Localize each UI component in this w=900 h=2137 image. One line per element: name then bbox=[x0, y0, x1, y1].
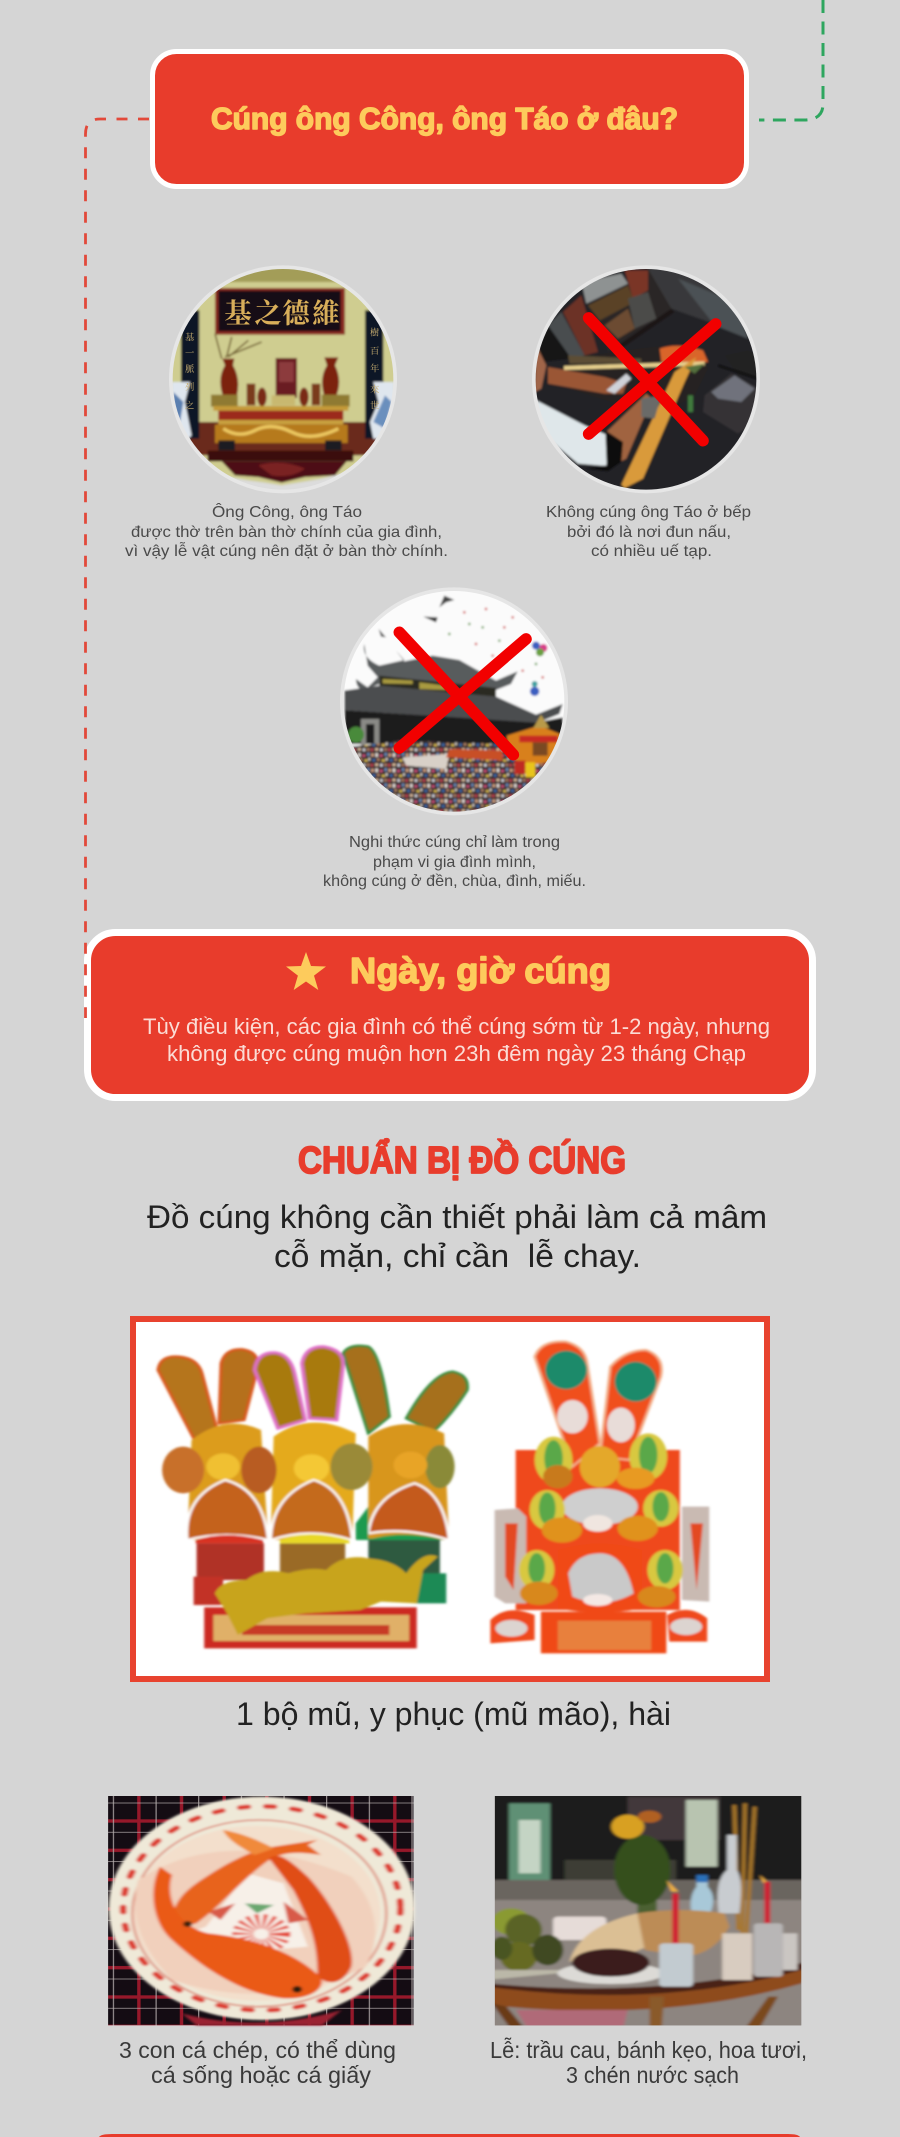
icon: red cross bbox=[589, 318, 716, 441]
red paper hat set bbox=[490, 1342, 709, 1653]
heading: date and time: Ngày, giờ cúng bbox=[350, 950, 611, 991]
left couplet: 列 bbox=[185, 379, 194, 393]
body text bbox=[143, 1014, 770, 1066]
left couplet: 之 bbox=[185, 398, 194, 412]
left couplet: 脈 bbox=[185, 361, 195, 375]
panel: altar photo circle bbox=[165, 262, 401, 498]
caption: carp: 3 con cá chép, có thể dùng bbox=[119, 2037, 396, 2063]
title box bbox=[152, 52, 746, 186]
caption: kitchen: Không cúng ông Táo ở bếp bbox=[546, 504, 751, 521]
caption: altar: được thờ trên bàn thờ chính của gia đình, bbox=[131, 524, 442, 541]
caption: altar bbox=[125, 502, 448, 560]
caption: altar: vì vậy lễ vật cúng nên đặt ở bàn thờ chính. bbox=[125, 541, 448, 560]
caption: temple: không cúng ở đền, chùa, đình, miếu. bbox=[323, 873, 586, 890]
caption: hats: 1 bộ mũ, y phục (mũ mão), hài bbox=[236, 1696, 671, 1732]
caption: offering table: Lễ: trầu cau, bánh kẹo, hoa tươi, bbox=[490, 2037, 807, 2063]
icon: star bbox=[286, 952, 326, 990]
left couplet: 一 bbox=[185, 345, 194, 359]
right couplet: 年 bbox=[370, 360, 379, 374]
caption: carp bbox=[119, 2037, 396, 2088]
connector: green dashed line bbox=[759, 0, 823, 120]
caption: offering table bbox=[490, 2037, 807, 2088]
panel: temple photo circle with cross bbox=[336, 584, 572, 820]
panel: paper hats image bbox=[133, 1319, 767, 1679]
right couplet: 世 bbox=[370, 398, 379, 412]
caption: temple: phạm vi gia đình mình, bbox=[373, 854, 536, 871]
title text: Cúng ông Công, ông Táo ở đâu? bbox=[211, 101, 678, 136]
intro text: Đồ cúng không cần thiết phải làm cả mâm bbox=[147, 1199, 767, 1235]
panel: carp photo bbox=[108, 1796, 415, 2025]
body text: Tùy điều kiện, các gia đình có thể cúng sớm từ 1-2 ngày, nhưng bbox=[143, 1014, 770, 1039]
caption: kitchen: bởi đó là nơi đun nấu, bbox=[567, 524, 731, 541]
icon: red cross bbox=[399, 632, 526, 755]
caption: carp: cá sống hoặc cá giấy bbox=[151, 2062, 372, 2088]
right couplet: 來 bbox=[370, 382, 379, 396]
panel: offering table photo bbox=[487, 1790, 807, 2030]
caption: offering table: 3 chén nước sạch bbox=[566, 2062, 739, 2088]
panel: date and time box bbox=[88, 932, 812, 1098]
right couplet: 樹 bbox=[370, 324, 380, 338]
left couplet: 基 bbox=[185, 329, 195, 343]
intro text: cỗ mặn, chỉ cần lễ chay. bbox=[274, 1238, 641, 1274]
heading: prepare offerings: CHUẨN BỊ ĐỒ CÚNG bbox=[298, 1137, 626, 1182]
caption: altar: Ông Công, ông Táo bbox=[212, 502, 362, 521]
right couplet: 百 bbox=[370, 343, 379, 357]
caption: kitchen: có nhiều uế tạp. bbox=[591, 543, 712, 560]
caption: kitchen bbox=[546, 504, 751, 560]
caption: temple: Nghi thức cúng chỉ làm trong bbox=[349, 834, 560, 851]
caption: temple bbox=[323, 834, 586, 890]
panel: kitchen photo circle with cross bbox=[528, 262, 764, 498]
next panel top edge bbox=[99, 2134, 800, 2137]
sign calligraphy: 基之德維 bbox=[224, 292, 340, 331]
body text: không được cúng muộn hơn 23h đêm ngày 23 tháng Chạp bbox=[167, 1041, 746, 1066]
three gold hats bbox=[158, 1346, 467, 1648]
intro text bbox=[147, 1199, 767, 1274]
connector: red dashed line bbox=[86, 119, 149, 1018]
